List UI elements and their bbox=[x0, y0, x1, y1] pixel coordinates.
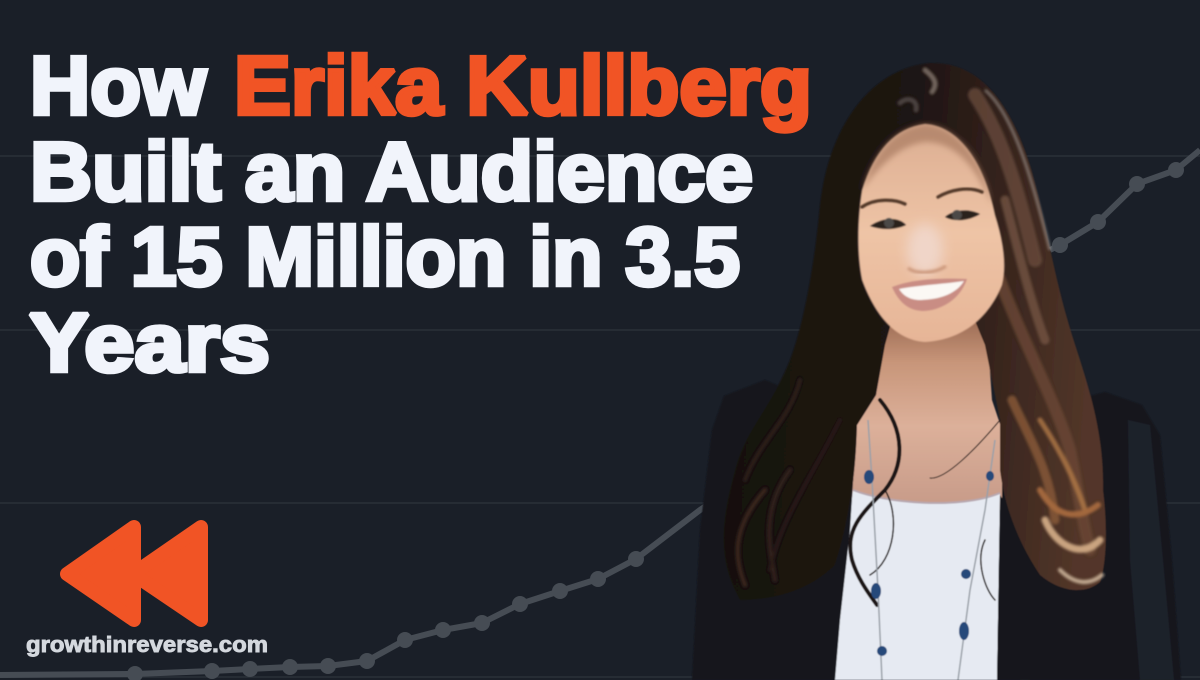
hair curl strands over shirt bbox=[850, 400, 1000, 605]
chart gridlines bbox=[0, 156, 1200, 677]
face bbox=[858, 124, 1004, 342]
left lapel bbox=[760, 420, 857, 680]
website url: growthinreverse.com bbox=[26, 632, 268, 657]
title: of 15 Million in 3.5 bbox=[30, 210, 740, 303]
nose shadow bbox=[908, 266, 946, 272]
title: Erika Kullberg bbox=[234, 39, 812, 132]
blazer sheen bbox=[1016, 600, 1055, 680]
title: How bbox=[30, 39, 206, 132]
eyebrows bbox=[862, 189, 982, 207]
blazer sleeve highlight bbox=[1128, 420, 1174, 680]
neck and chest bbox=[850, 300, 1002, 510]
title: Years bbox=[29, 296, 270, 389]
title: Built an Audience bbox=[30, 125, 753, 218]
smile bbox=[892, 279, 967, 311]
right lapel bbox=[997, 495, 1090, 680]
growth line chart bbox=[0, 150, 1200, 680]
hair highlights bbox=[738, 70, 1102, 585]
hair bbox=[724, 63, 1106, 600]
shirt bbox=[830, 490, 1000, 680]
forehead hair shadow bbox=[862, 124, 992, 205]
shirt collar shadow bbox=[853, 490, 1000, 503]
portrait of Erika Kullberg bbox=[692, 63, 1181, 680]
nose highlight bbox=[907, 224, 943, 276]
hair halo bbox=[985, 90, 1050, 250]
eyes bbox=[870, 210, 980, 229]
blazer bbox=[692, 380, 1181, 680]
necklace bbox=[864, 420, 995, 680]
icon: rewind logo bbox=[67, 527, 201, 620]
title bbox=[29, 39, 812, 389]
